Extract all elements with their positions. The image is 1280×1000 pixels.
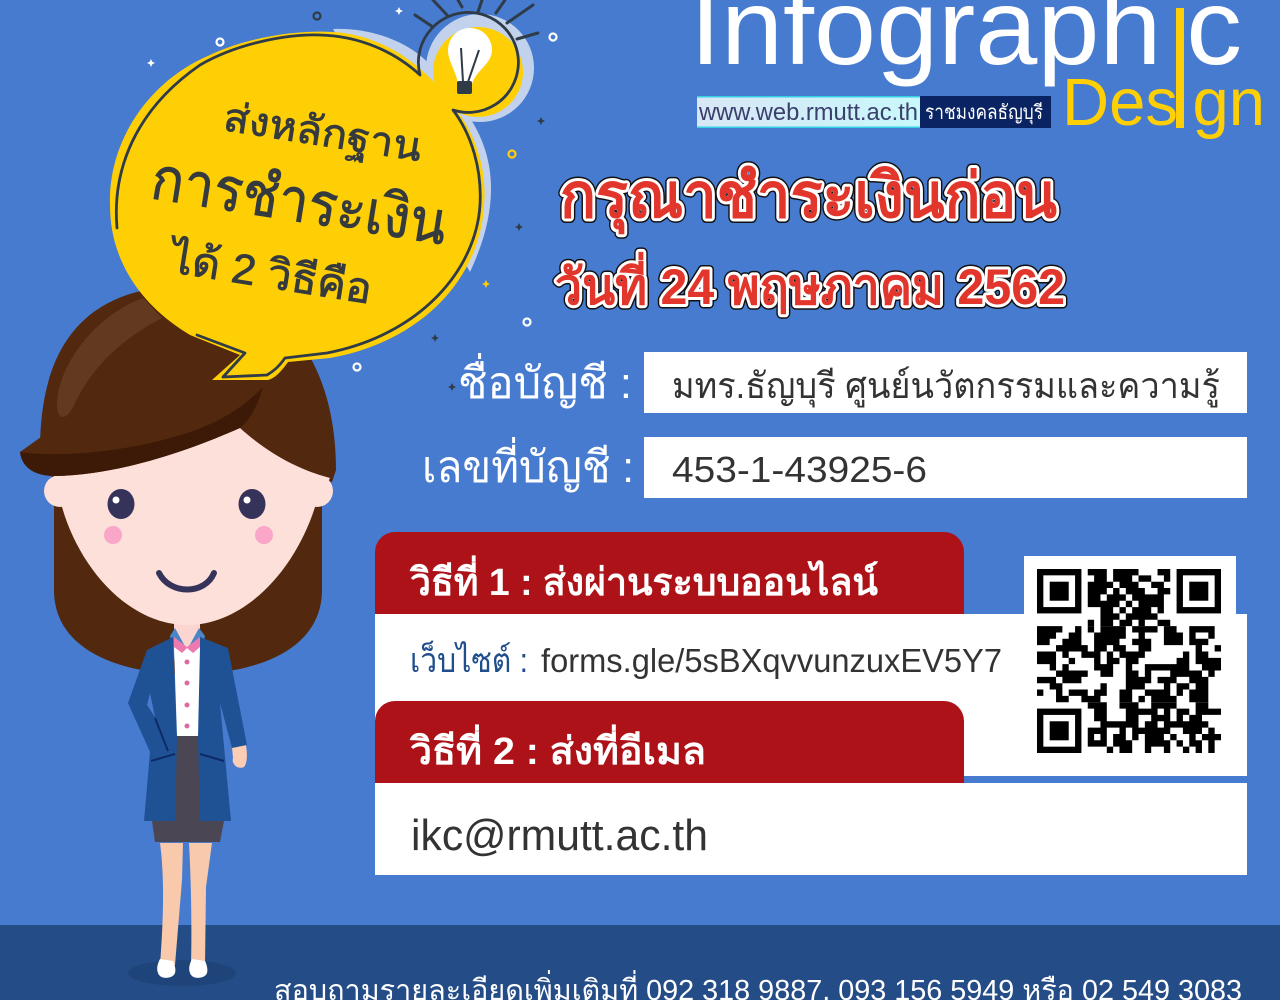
method 2 panel [375, 701, 1247, 875]
title: Infographic Design: Design [1062, 65, 1265, 140]
account number row: 453-1-43925-6 [672, 449, 927, 490]
website badge [697, 96, 1051, 128]
heading: payment deadline: วันที่ 24 พฤษภาคม 2562 [555, 252, 1065, 315]
account number row [422, 436, 1247, 498]
smile [159, 573, 214, 590]
method 1 panel: forms.gle/5sBXqvvunzuxEV5Y7 [541, 642, 1002, 679]
account name row: มทร.ธัญบุรี ศูนย์นวัตกรรมและความรู้ [672, 365, 1220, 408]
account name row [458, 352, 1247, 413]
bulb [448, 28, 492, 84]
eyes [108, 489, 134, 519]
account name row: ชื่อบัญชี : [458, 352, 632, 408]
method 1 panel [375, 532, 1247, 776]
website badge: ราชมงคลธัญบุรี [925, 102, 1043, 125]
hand [232, 745, 247, 768]
bubble text [147, 95, 452, 313]
account number row: เลขที่บัญชี : [422, 436, 634, 492]
skirt [152, 821, 224, 842]
website badge: www.web.rmutt.ac.th [698, 99, 918, 126]
hair highlight [57, 298, 162, 417]
method 1 panel: เว็บไซต์ : [410, 640, 528, 680]
character: woman in blue blazer [20, 286, 336, 978]
method 1 panel: วิธีที่ 1 : ส่งผ่านระบบออนไลน์ [409, 555, 878, 604]
shoes [157, 959, 207, 978]
ears [44, 475, 76, 507]
legs [160, 843, 212, 965]
face [56, 428, 330, 625]
method 2 panel: ikc@rmutt.ac.th [411, 811, 708, 860]
pockets [151, 718, 224, 761]
lightbulb rays [415, 0, 538, 39]
bow collar [174, 637, 200, 653]
heading: payment deadline: กรุณาชำระเงินก่อน [560, 162, 1057, 234]
bangs shadow [20, 387, 263, 476]
blazer [128, 637, 247, 821]
cheeks [104, 526, 122, 544]
hair back [40, 286, 336, 675]
bubble text: ส่งหลักฐาน [220, 95, 425, 172]
decorative sparkles [147, 7, 556, 391]
heading: payment deadline [555, 162, 1065, 315]
bangs [20, 290, 263, 476]
inner skirt [175, 736, 200, 821]
bubble outline [116, 12, 518, 377]
bubble text: ได้ 2 วิธีคือ [165, 234, 375, 313]
QR code [1024, 556, 1236, 766]
bubble shadow [333, 29, 491, 272]
title: Infographic Design [690, 0, 1265, 140]
speech bubble with lightbulb [110, 0, 538, 380]
footer band [0, 925, 1280, 1000]
heading: payment deadline: กรุณาชำระเงินก่อน [560, 162, 1057, 234]
shirt [174, 647, 200, 736]
heading: payment deadline: วันที่ 24 พฤษภาคม 2562 [555, 252, 1065, 315]
bubble text: การชำระเงิน [147, 145, 452, 257]
method 2 panel: วิธีที่ 2 : ส่งที่อีเมล [409, 724, 706, 773]
shirt buttons [184, 660, 190, 728]
yellow bubble body [110, 32, 485, 380]
neck and collar [174, 622, 200, 648]
